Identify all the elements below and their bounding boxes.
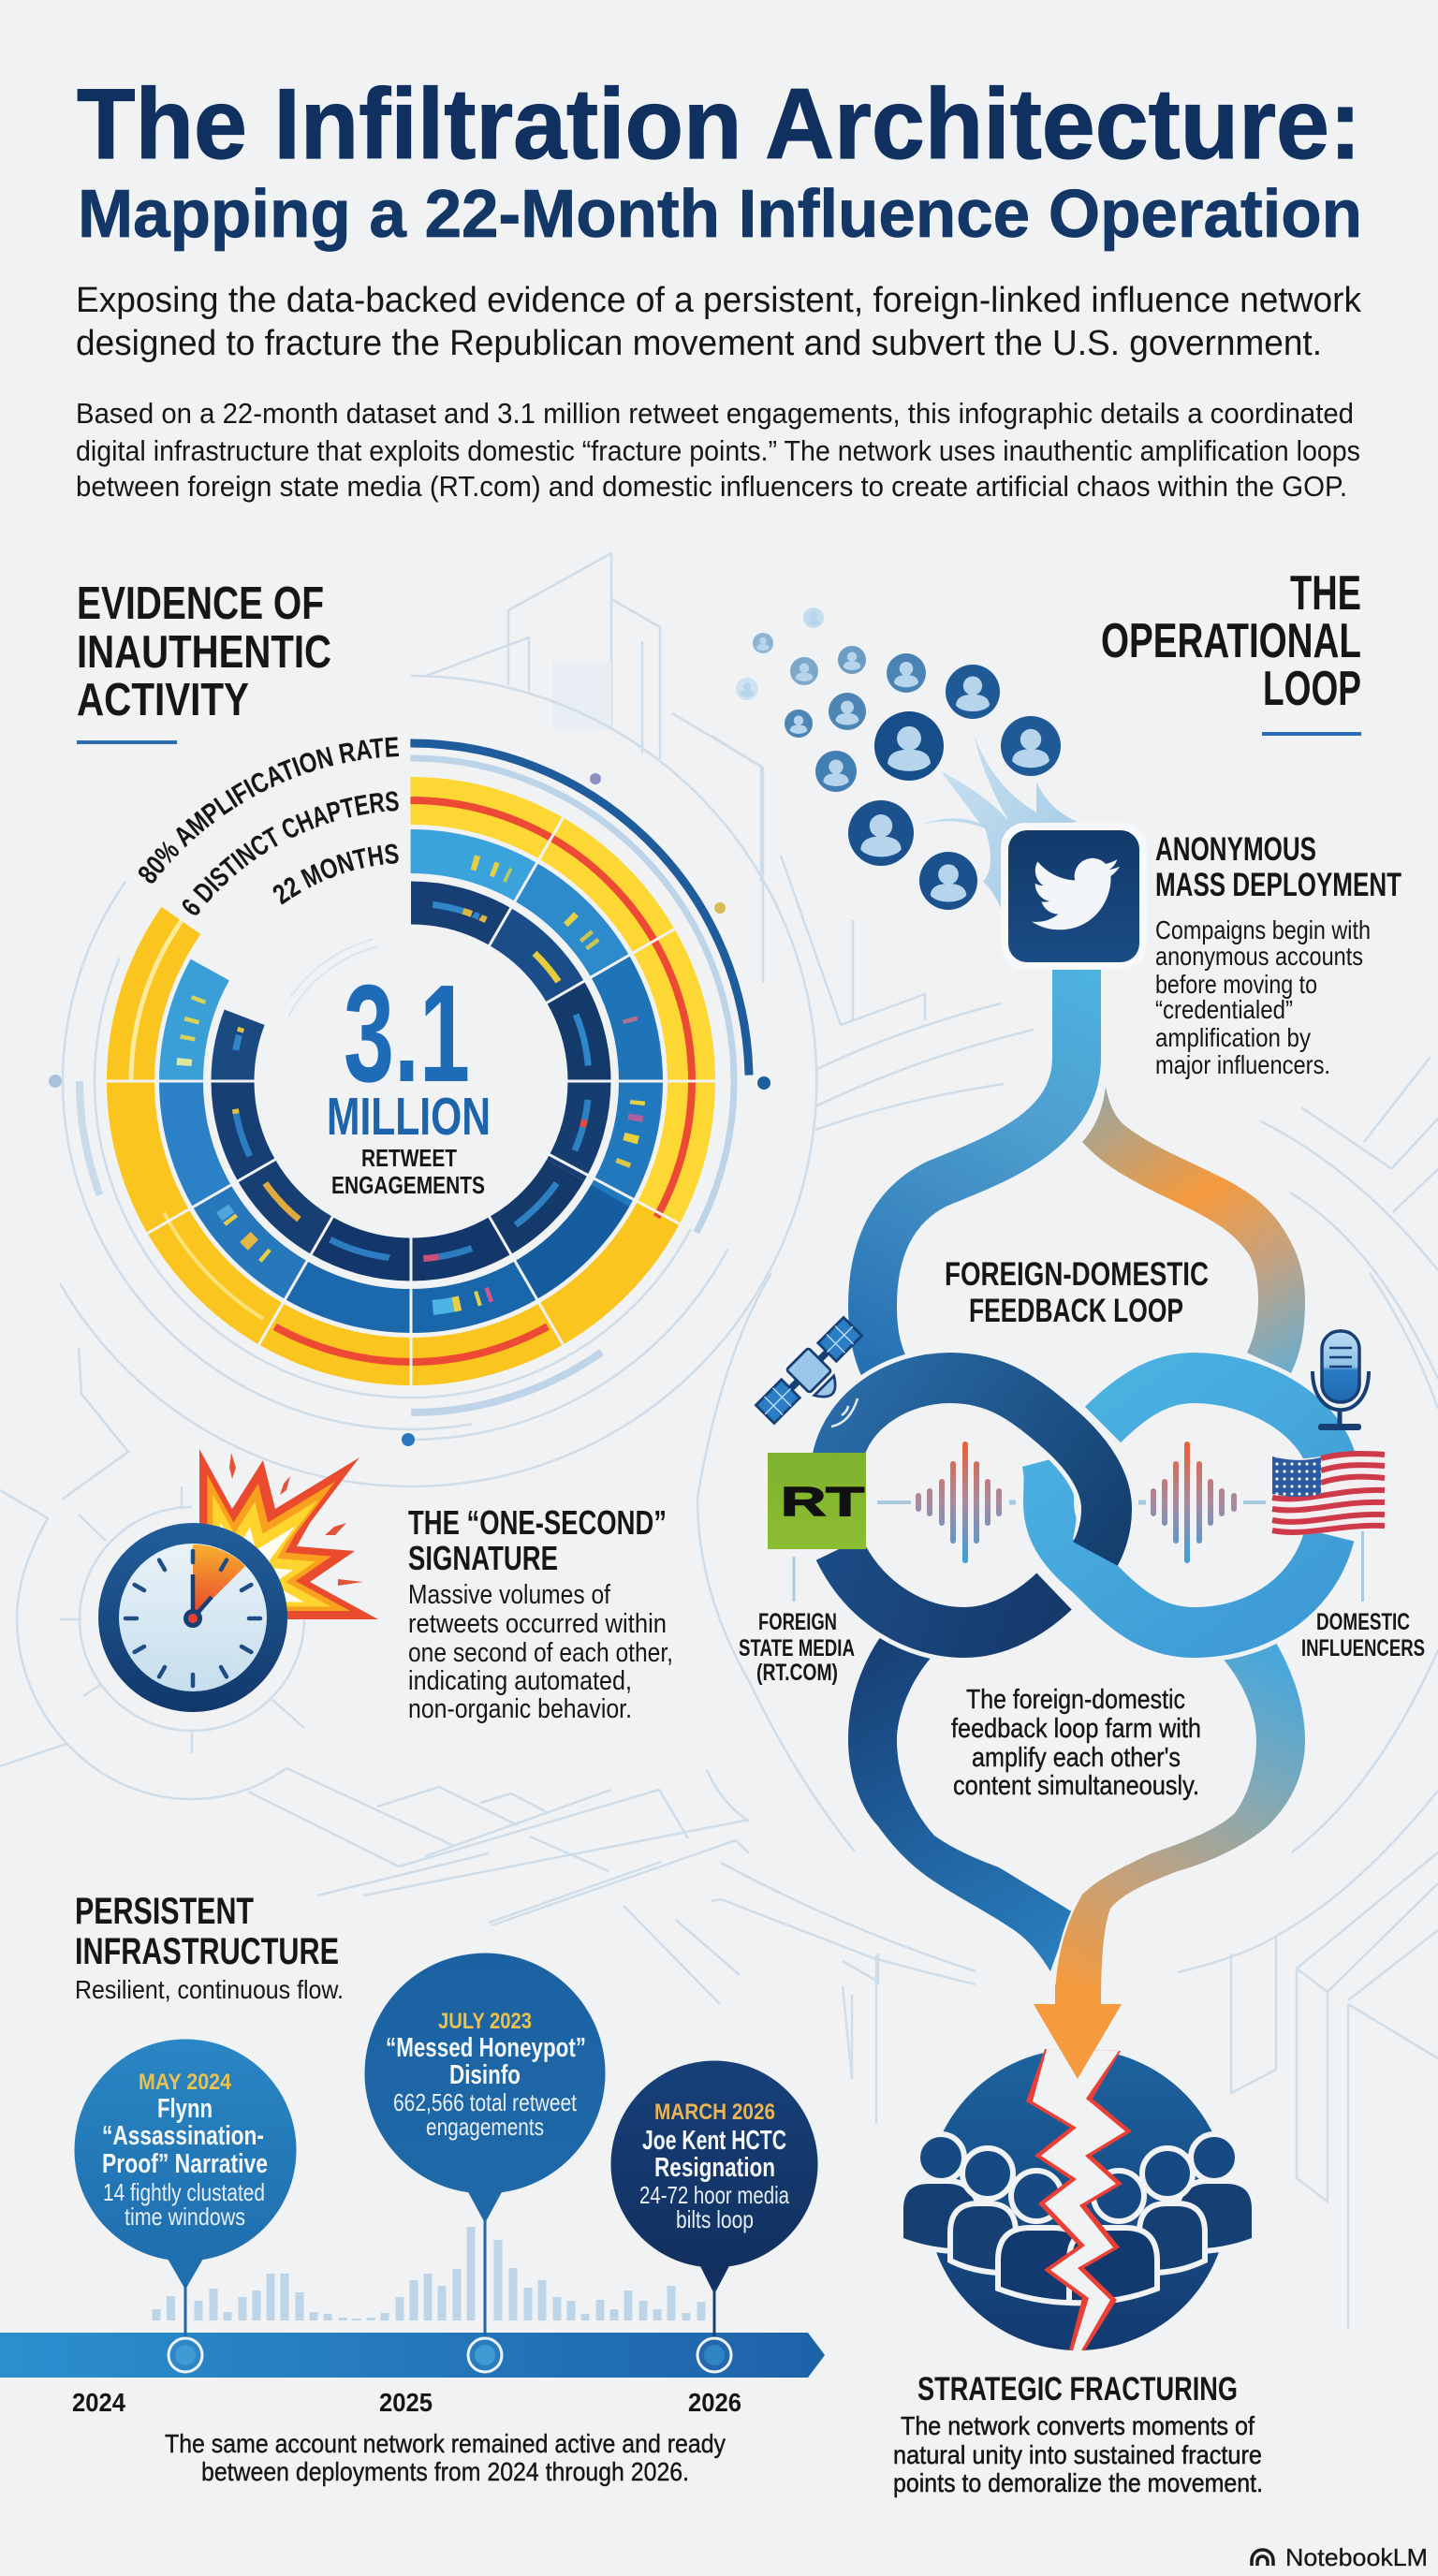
ring: yellow — [25, 695, 797, 1467]
callout: july 2023 — [365, 1953, 605, 2372]
text: the one-second signature: non-organic behavior. — [408, 1694, 632, 1724]
heading: the operational loop: LOOP — [1263, 662, 1361, 716]
callout: march 2026: Resignation — [654, 2153, 775, 2183]
callout: july 2023: 662,566 total retweet — [393, 2088, 578, 2116]
text: feedback description: feedback loop farm with — [951, 1714, 1201, 1744]
timeline year labels: 2026 — [688, 2388, 741, 2417]
text: the one-second signature: retweets occurred within — [408, 1609, 667, 1639]
heading: persistent infrastructure: Resilient, continuous flow. — [75, 1975, 344, 2004]
callout: march 2026: MARCH 2026 — [654, 2100, 775, 2125]
central metric: RETWEET — [361, 1144, 457, 1172]
callout: july 2023: JULY 2023 — [438, 2009, 532, 2034]
arrow head overlay — [1034, 1984, 1122, 2079]
waveform: left — [877, 1444, 1016, 1560]
central metric: 3.1 — [344, 957, 470, 1111]
callout: july 2023: engagements — [426, 2113, 544, 2141]
timeline caption: between deployments from 2024 through 2026. — [201, 2457, 689, 2486]
ring: dark navy — [168, 838, 654, 1325]
label: domestic influencers — [1301, 1531, 1425, 1661]
ring: blue — [97, 768, 725, 1395]
label: foreign state media — [739, 1557, 855, 1686]
label: foreign state media: STATE MEDIA — [739, 1635, 855, 1661]
text: strategic fracturing — [893, 2371, 1263, 2497]
curved ring labels: 22 MONTHS — [273, 844, 399, 905]
icon: amplification spikes — [920, 734, 1078, 908]
timeline caption: The same account network remained active and ready — [165, 2429, 726, 2458]
central metric — [327, 957, 491, 1199]
icon: us flag — [1272, 1452, 1385, 1534]
text: foreign-domestic feedback loop heading — [945, 1256, 1209, 1329]
ribbon: lower dark branch — [848, 1633, 1073, 1971]
feedback loop: interlocking rings — [837, 1378, 1332, 1632]
callout: may 2024: Proof” Narrative — [102, 2149, 268, 2179]
label: domestic influencers: DOMESTIC — [1316, 1609, 1410, 1635]
callout: may 2024: “Assassination- — [102, 2121, 264, 2151]
intro paragraph — [76, 397, 1360, 503]
icon: swarm of anonymous accounts — [736, 607, 1061, 910]
curved ring labels: 6 DISTINCT CHAPTERS — [182, 791, 399, 915]
text: feedback description — [951, 1685, 1201, 1801]
explosion burst — [199, 1449, 378, 1619]
text: anonymous mass deployment: major influencers. — [1155, 1050, 1330, 1079]
text: the one-second signature: SIGNATURE — [408, 1539, 558, 1577]
crowd left — [901, 2134, 1086, 2303]
intro paragraph: between foreign state media (RT.com) and domestic influencers to create artificial chaos within the GOP. — [76, 470, 1347, 503]
text: anonymous mass deployment: amplification by — [1155, 1023, 1311, 1052]
heading: the operational loop — [1101, 566, 1361, 736]
icon: twitter app tile — [1001, 823, 1147, 970]
icon: fractured crowd — [901, 2049, 1255, 2350]
intro paragraph: digital infrastructure that exploits domestic “fracture points.” The network uses inauthentic amplification loops — [76, 434, 1360, 467]
text: feedback description: content simultaneously. — [953, 1771, 1199, 1801]
icon: rt logo — [768, 1453, 866, 1549]
label: foreign state media: (RT.COM) — [756, 1660, 838, 1686]
heading: evidence of inauthentic activity: EVIDENCE OF — [77, 578, 324, 629]
text: foreign-domestic feedback loop heading: FEEDBACK LOOP — [969, 1293, 1183, 1329]
subtitle: Mapping a 22-Month Influence Operation — [78, 177, 1362, 252]
timeline year labels: 2025 — [379, 2388, 433, 2417]
timeline year labels: 2024 — [72, 2388, 125, 2417]
text: strategic fracturing: STRATEGIC FRACTURING — [917, 2371, 1238, 2408]
heading: persistent infrastructure — [75, 1891, 344, 2004]
text: strategic fracturing: The network converts moments of — [901, 2411, 1255, 2440]
notebooklm watermark: NotebookLM — [1285, 2543, 1428, 2571]
timeline arrow — [0, 2333, 825, 2378]
callout: may 2024: Flynn — [157, 2094, 213, 2124]
title: The Infiltration Architecture: — [77, 67, 1361, 180]
text: the one-second signature: indicating automated, — [408, 1666, 632, 1696]
crowd right — [1069, 2134, 1255, 2303]
text: anonymous mass deployment: “credentialed” — [1155, 995, 1293, 1024]
text: feedback description: The foreign-domestic — [966, 1685, 1185, 1715]
lead text: Exposing the data-backed evidence of a persistent, foreign-linked influence network — [76, 281, 1362, 320]
text: anonymous mass deployment: Compaigns begin with — [1155, 915, 1371, 944]
crack — [1026, 2049, 1132, 2350]
icon: microphone — [1313, 1331, 1369, 1430]
callout: march 2026: Joe Kent HCTC — [642, 2126, 786, 2156]
icon: rt logo: RT — [781, 1479, 864, 1525]
callout: may 2024: MAY 2024 — [139, 2070, 232, 2095]
arrow: lower branch into fracture — [1034, 1633, 1305, 2079]
text: anonymous mass deployment: ANONYMOUS — [1155, 831, 1316, 868]
curved ring labels: 80% AMPLIFICATION RATE — [139, 737, 399, 884]
heading: evidence of inauthentic activity: INAUTHENTIC — [77, 627, 331, 678]
text: anonymous mass deployment: anonymous accounts — [1155, 942, 1363, 971]
callout: march 2026: 24-72 hoor media — [639, 2181, 789, 2209]
callout: may 2024: time windows — [125, 2203, 245, 2231]
callout: may 2024 — [75, 2039, 296, 2372]
timeline bar chart — [152, 2227, 706, 2320]
icon: satellite — [754, 1315, 876, 1438]
callout: july 2023: “Messed Honeypot” — [386, 2033, 586, 2063]
callout: march 2026: bilts loop — [676, 2205, 754, 2233]
text: foreign-domestic feedback loop heading: FOREIGN-DOMESTIC — [945, 1256, 1209, 1293]
waveform: right — [1138, 1444, 1266, 1560]
timeline year labels — [72, 2388, 741, 2417]
callout: march 2026 — [610, 2061, 818, 2372]
text: anonymous mass deployment: before moving to — [1155, 970, 1317, 999]
ribbon: flow out of twitter — [873, 969, 1077, 1368]
heading: persistent infrastructure: PERSISTENT — [75, 1891, 254, 1932]
outer guide arcs and dots — [0, 596, 896, 1566]
label: foreign state media: FOREIGN — [758, 1609, 837, 1635]
callout: may 2024: 14 fightly clustated — [103, 2178, 265, 2206]
callout: july 2023: Disinfo — [449, 2060, 521, 2090]
text: the one-second signature: Massive volumes of — [408, 1580, 611, 1610]
text: the one-second signature: one second of each other, — [408, 1638, 673, 1668]
ring data marks — [89, 759, 733, 1403]
heading: persistent infrastructure: INFRASTRUCTURE — [75, 1931, 339, 1972]
timeline caption — [165, 2429, 726, 2486]
central metric: ENGAGEMENTS — [331, 1171, 485, 1199]
radial chart: 3.1 million retweet engagements — [49, 737, 770, 1446]
ribbon: orange branch — [1082, 1087, 1305, 1373]
lead text: designed to fracture the Republican movement and subvert the U.S. government. — [76, 324, 1322, 363]
lead text — [76, 281, 1362, 363]
text: the one-second signature: THE “ONE-SECOND” — [408, 1503, 667, 1542]
central metric: MILLION — [327, 1087, 491, 1147]
icon: stopwatch with explosion — [98, 1449, 378, 1712]
text: feedback description: amplify each other's — [972, 1743, 1181, 1773]
text: strategic fracturing: natural unity into sustained fracture — [893, 2440, 1262, 2469]
heading: evidence of inauthentic activity — [77, 578, 331, 744]
text: strategic fracturing: points to demoralize the movement. — [893, 2468, 1263, 2497]
intro paragraph: Based on a 22-month dataset and 3.1 million retweet engagements, this infographic details a coordinated — [76, 397, 1354, 430]
heading: evidence of inauthentic activity: ACTIVITY — [77, 675, 249, 725]
heading: the operational loop: THE — [1290, 566, 1361, 621]
text: anonymous mass deployment — [1155, 831, 1401, 1079]
text: the one-second signature — [408, 1503, 673, 1724]
